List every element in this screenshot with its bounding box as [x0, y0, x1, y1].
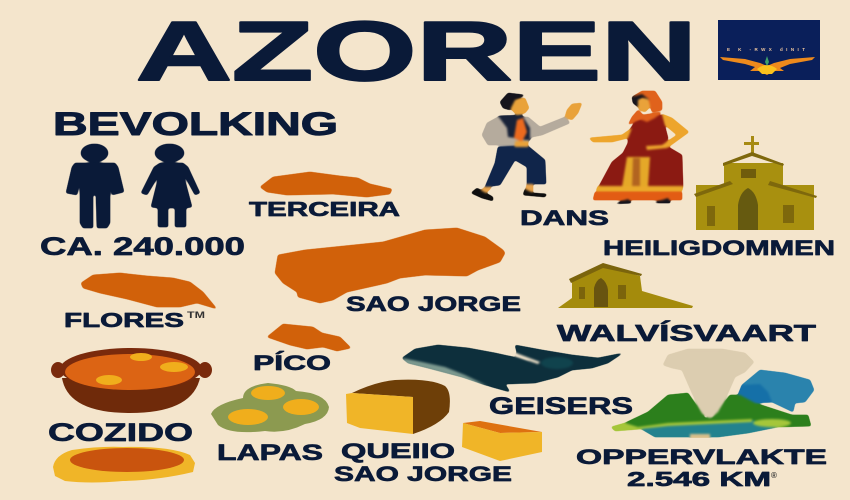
icon: church [694, 136, 817, 230]
island: Sao Jorge: SAO JORGE [346, 293, 521, 316]
icon: female dancer [589, 91, 689, 204]
shrines label: HEILIGDOMMEN [603, 237, 835, 260]
icon: island landscape with geyser [611, 349, 814, 438]
panel: cozido [48, 348, 212, 482]
cozido label: COZIDO [48, 419, 193, 447]
population figure: CA. 240.000 [40, 233, 245, 261]
icon: male dancer [471, 93, 582, 201]
icon: flag of the Azores [718, 20, 820, 80]
island: Flores: FLORES [64, 310, 184, 332]
icon: woman [141, 144, 200, 227]
icon: cheese wheel [346, 380, 450, 434]
icon: man [66, 144, 124, 228]
panel: population [40, 106, 338, 261]
icon: flag of the Azores: E K -RWX dINIT [727, 47, 805, 52]
island: Flores [64, 273, 217, 332]
icon: stew pot [51, 348, 212, 413]
title: AZOREN [136, 4, 697, 98]
island: Sao Jorge [275, 228, 521, 316]
panel: dance [471, 91, 689, 230]
dance label: DANS [520, 207, 609, 230]
cheese label: QUEIIO [341, 440, 455, 463]
icon: whale [402, 345, 623, 392]
island: Terceira: TERCEIRA [249, 199, 400, 221]
panel: whaling [557, 263, 816, 346]
lapas label: LAPAS [217, 440, 323, 465]
panel: surface area: ® [771, 471, 777, 480]
icon: limpets [211, 383, 329, 432]
panel: lapas [211, 383, 329, 465]
geysers label: GEISERS [489, 393, 633, 420]
whaling label: WALVÍSVAART [557, 319, 816, 346]
icon: whaling station [558, 263, 693, 308]
surface area label: OPPERVLAKTE [576, 446, 827, 469]
panel: cheese: SAO JORGE [334, 463, 512, 486]
panel: shrines [603, 136, 835, 260]
icon: flat dish [53, 447, 195, 482]
panel: surface area [576, 349, 827, 491]
island: Pico [253, 324, 351, 375]
heading: population: BEVOLKING [53, 106, 338, 142]
island: Pico: PÍCO [253, 352, 331, 375]
island: Terceira [249, 172, 400, 221]
island: Flores: TM [187, 310, 205, 320]
surface area figure: 2.546 KM [627, 469, 771, 491]
icon: cheese slice [462, 421, 542, 461]
panel: cheese [334, 380, 542, 486]
